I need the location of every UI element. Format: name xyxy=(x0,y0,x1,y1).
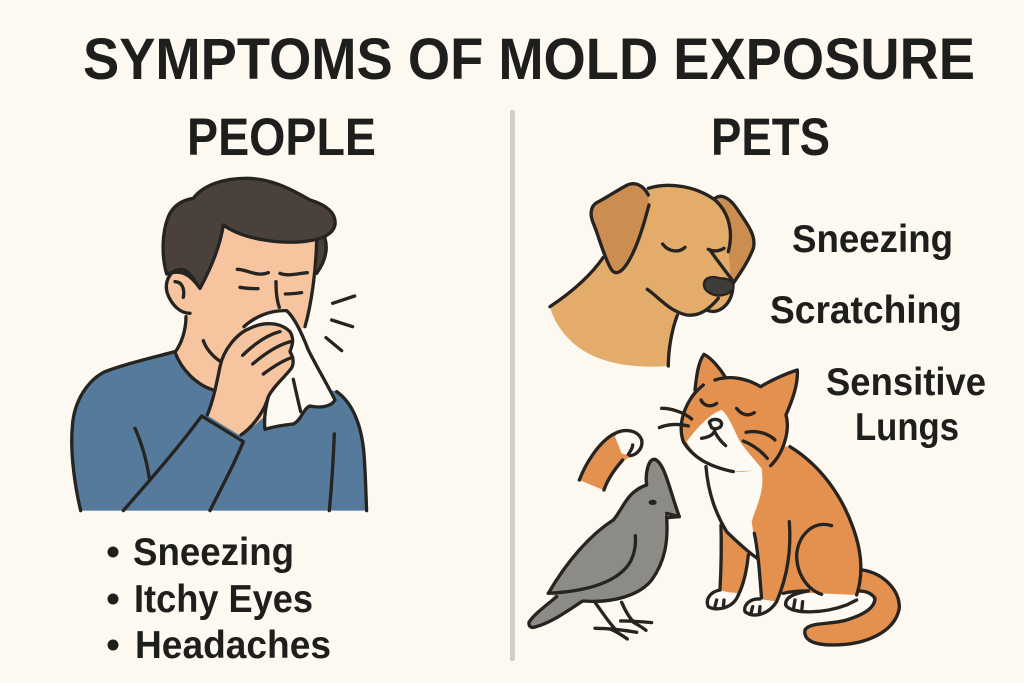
pet symptom labels: Lungs xyxy=(855,406,959,449)
hair xyxy=(163,178,335,288)
cat tail xyxy=(805,570,899,645)
pet symptom labels: Sneezing xyxy=(792,218,953,261)
heading: people: PEOPLE xyxy=(187,108,376,167)
paws xyxy=(707,590,738,609)
list: people symptoms: Itchy Eyes xyxy=(134,578,313,621)
far ear xyxy=(715,196,754,283)
nose xyxy=(704,277,734,295)
near ear xyxy=(591,184,649,273)
eyes xyxy=(663,244,685,251)
neckline xyxy=(175,352,213,390)
pet symptom labels: Scratching xyxy=(770,289,962,332)
bird xyxy=(529,459,679,627)
tissue xyxy=(244,311,335,429)
head and neck xyxy=(550,185,732,367)
pet symptom labels xyxy=(770,218,986,449)
cat head xyxy=(681,354,797,472)
title: SYMPTOMS OF MOLD EXPOSURE xyxy=(83,27,975,92)
shirt xyxy=(72,352,367,511)
list: people symptoms: Sneezing xyxy=(133,531,294,574)
list: people symptoms: Headaches xyxy=(135,624,331,667)
severed paw xyxy=(579,433,633,490)
icon: sneezing man xyxy=(72,178,367,511)
list: people symptoms xyxy=(108,531,331,667)
heading: pets: PETS xyxy=(711,108,830,167)
sneeze lines xyxy=(333,296,355,303)
face lines xyxy=(305,241,317,327)
pet symptom labels: Sensitive xyxy=(826,361,986,404)
sleeve xyxy=(123,416,243,511)
icon: dog xyxy=(550,184,754,367)
shirt outline xyxy=(72,352,175,511)
skin xyxy=(168,225,317,437)
hand xyxy=(207,324,293,435)
icon: bird and cat xyxy=(529,354,899,645)
cat body xyxy=(707,445,861,602)
